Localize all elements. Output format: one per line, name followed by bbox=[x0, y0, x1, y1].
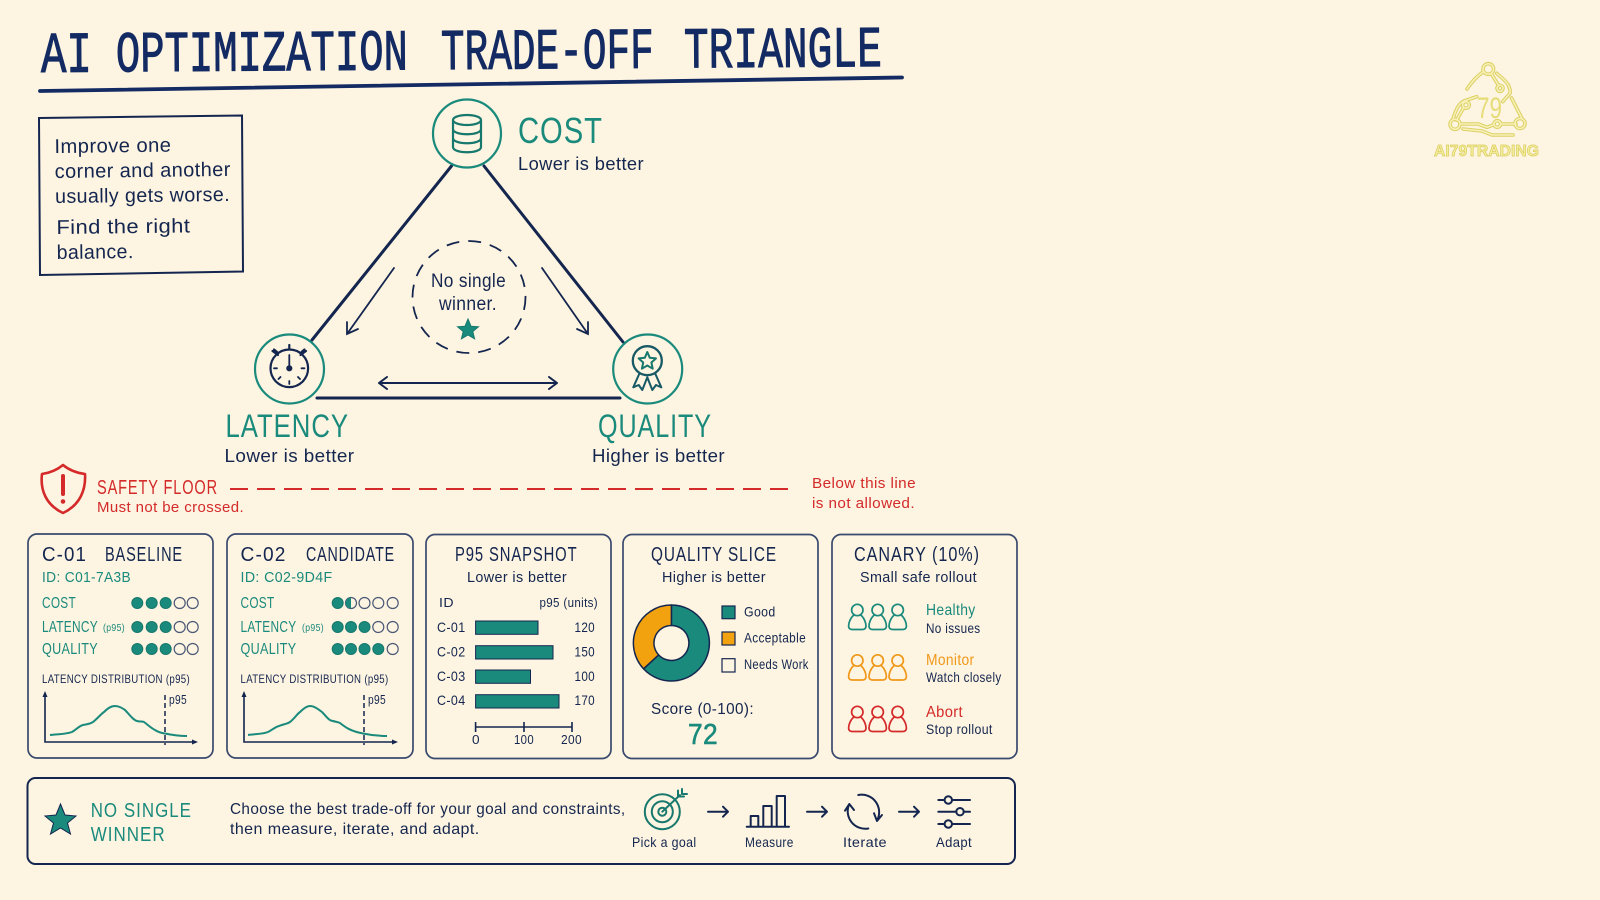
arrow bbox=[899, 807, 919, 817]
bar chart: 170 bbox=[574, 692, 595, 708]
logo: AI79TRADING: 79 bbox=[1477, 92, 1502, 125]
step: adapt bbox=[936, 796, 972, 850]
step: adapt: Adapt bbox=[936, 834, 972, 850]
status: abort: Abort bbox=[926, 704, 963, 721]
safety floor: is not allowed. bbox=[812, 495, 915, 512]
panel: C-02 candidate: QUALITY bbox=[240, 641, 296, 658]
status: monitor: Monitor bbox=[926, 652, 975, 669]
note box: balance. bbox=[57, 241, 134, 264]
title: TRIANGLE bbox=[684, 19, 882, 86]
legend bbox=[722, 604, 809, 672]
label: latency: LATENCY bbox=[226, 408, 349, 444]
score: Score (0-100): bbox=[651, 701, 754, 718]
arrow: latency and quality bbox=[379, 377, 557, 389]
bar chart: 150 bbox=[574, 644, 595, 660]
chart: latency distribution: p95 bbox=[368, 692, 386, 707]
panel: C-01 baseline: (p95) bbox=[103, 623, 125, 634]
safety floor bbox=[42, 465, 916, 516]
note box: usually gets worse. bbox=[55, 184, 230, 208]
heading: P95 SNAPSHOT bbox=[455, 544, 578, 566]
panel: C-02 candidate: COST bbox=[240, 595, 274, 612]
title: AI bbox=[41, 25, 92, 90]
status: healthy: Healthy bbox=[926, 602, 976, 619]
bar chart bbox=[437, 619, 595, 747]
title bbox=[41, 19, 882, 90]
bar chart: C-03 bbox=[437, 668, 466, 684]
safety floor: SAFETY FLOOR bbox=[97, 477, 218, 499]
legend: Acceptable bbox=[744, 630, 806, 646]
bar chart axis: 100 bbox=[514, 732, 534, 747]
legend: Needs Work bbox=[744, 656, 809, 672]
panel: bottom takeaway bar bbox=[28, 778, 1015, 864]
label: cost bbox=[518, 110, 644, 174]
takeaway text: Choose the best trade-off for your goal and constraints, bbox=[230, 801, 626, 818]
rating dots: quality bbox=[132, 644, 198, 654]
center callout: no single winner: winner. bbox=[438, 294, 497, 315]
note box: Find the right bbox=[56, 215, 191, 239]
status: monitor: Watch closely bbox=[926, 669, 1002, 685]
panel: canary rollout: Small safe rollout bbox=[860, 569, 977, 586]
panel: p95 snapshot bbox=[426, 534, 611, 758]
donut chart bbox=[633, 605, 709, 681]
icon: shield bbox=[42, 465, 85, 513]
arrow: cost to quality bbox=[542, 268, 588, 334]
safety floor dashed line bbox=[230, 488, 794, 490]
panel: p95 snapshot: ID bbox=[439, 595, 454, 610]
safety floor: Must not be crossed. bbox=[97, 499, 244, 516]
label: cost: COST bbox=[518, 110, 603, 151]
score: 72 bbox=[688, 719, 718, 751]
takeaway text bbox=[230, 801, 626, 838]
note box: Improve one bbox=[54, 135, 172, 158]
heading: C-02 bbox=[240, 544, 286, 566]
bar chart axis bbox=[472, 722, 582, 747]
arrow bbox=[708, 807, 728, 817]
heading: BASELINE bbox=[105, 544, 183, 566]
status: abort: Stop rollout bbox=[926, 721, 993, 737]
trade-off triangle bbox=[255, 100, 682, 404]
rating dots: latency bbox=[132, 622, 198, 632]
bar chart: 120 bbox=[574, 619, 595, 635]
bar chart axis: 200 bbox=[561, 732, 582, 747]
panel: C-02 candidate bbox=[227, 534, 413, 758]
arrow: cost to latency bbox=[347, 268, 394, 334]
chart: latency distribution: p95 bbox=[169, 692, 187, 707]
label: quality bbox=[592, 408, 725, 466]
score bbox=[651, 701, 754, 751]
triangle edges bbox=[312, 166, 623, 398]
step: measure bbox=[745, 796, 794, 850]
bar chart axis: 0 bbox=[472, 732, 480, 747]
icon: star bbox=[45, 804, 76, 834]
rating dots: latency bbox=[332, 622, 398, 632]
rating dots: cost bbox=[132, 598, 198, 608]
panel: C-02 candidate: (p95) bbox=[302, 623, 324, 634]
bar chart: C-02 bbox=[437, 644, 466, 660]
panel: C-01 baseline: QUALITY bbox=[42, 641, 98, 658]
step: measure: Measure bbox=[745, 834, 794, 850]
panel: C-01 baseline bbox=[28, 534, 213, 758]
heading bbox=[240, 544, 395, 566]
title: OPTIMIZATION bbox=[116, 22, 408, 89]
panel: p95 snapshot: p95 (units) bbox=[540, 595, 598, 610]
chart: latency distribution bbox=[242, 691, 398, 745]
heading: no single winner bbox=[91, 800, 192, 846]
panel: quality slice bbox=[623, 534, 818, 758]
label: quality: Higher is better bbox=[592, 446, 725, 466]
step: iterate bbox=[843, 795, 887, 850]
label: quality: QUALITY bbox=[598, 408, 712, 444]
logo: AI79TRADING bbox=[1434, 64, 1539, 160]
title: TRADE-OFF bbox=[441, 21, 654, 87]
panel: C-01 baseline: LATENCY DISTRIBUTION (p95) bbox=[42, 672, 190, 686]
heading: CANDIDATE bbox=[306, 544, 395, 566]
label: latency: Lower is better bbox=[224, 446, 354, 466]
center callout: no single winner bbox=[412, 241, 526, 353]
panel: C-02 candidate: ID: C02-9D4F bbox=[240, 570, 332, 586]
panel: C-01 baseline: ID: C01-7A3B bbox=[42, 570, 131, 586]
bar chart: C-01 bbox=[437, 619, 466, 635]
center callout: no single winner: No single bbox=[431, 271, 506, 292]
rating dots: quality bbox=[332, 644, 398, 654]
panel: C-02 candidate: LATENCY DISTRIBUTION (p95) bbox=[240, 672, 388, 686]
status: healthy bbox=[849, 602, 980, 636]
safety floor: Below this line bbox=[812, 475, 916, 492]
panel: canary rollout bbox=[832, 534, 1017, 758]
step: iterate: Iterate bbox=[843, 834, 887, 850]
note box: corner and another bbox=[55, 159, 231, 183]
label: latency bbox=[224, 408, 354, 466]
step: pick a goal: Pick a goal bbox=[632, 834, 696, 850]
icon: latency stopwatch bbox=[255, 334, 324, 404]
heading: no single winner: WINNER bbox=[91, 824, 166, 846]
status: monitor bbox=[849, 652, 1002, 685]
status: healthy: No issues bbox=[926, 620, 980, 636]
rating dots: cost bbox=[332, 598, 398, 608]
panel: p95 snapshot: Lower is better bbox=[467, 569, 567, 586]
panel: quality slice: Higher is better bbox=[662, 569, 766, 586]
heading: C-01 bbox=[42, 544, 87, 566]
icon: quality ribbon badge bbox=[613, 334, 682, 404]
bar chart: C-04 bbox=[437, 692, 466, 708]
heading: QUALITY SLICE bbox=[651, 544, 777, 566]
arrow bbox=[807, 807, 827, 817]
chart: latency distribution bbox=[42, 691, 198, 745]
heading bbox=[42, 544, 183, 566]
logo: AI79TRADING: AI79TRADING bbox=[1434, 143, 1539, 160]
status: abort bbox=[849, 704, 993, 737]
panel: C-01 baseline: COST bbox=[42, 595, 76, 612]
icon: cost database bbox=[433, 100, 501, 168]
panel: C-01 baseline: LATENCY bbox=[42, 619, 98, 636]
panel: C-02 candidate: LATENCY bbox=[240, 619, 296, 636]
note box bbox=[39, 116, 243, 275]
bar chart: 100 bbox=[574, 668, 595, 684]
heading: CANARY (10%) bbox=[854, 544, 980, 566]
heading: no single winner: NO SINGLE bbox=[91, 800, 192, 822]
legend: Good bbox=[744, 604, 776, 620]
step: pick a goal bbox=[632, 789, 696, 850]
takeaway text: then measure, iterate, and adapt. bbox=[230, 821, 480, 838]
title underline bbox=[40, 78, 902, 91]
label: cost: Lower is better bbox=[518, 154, 644, 174]
